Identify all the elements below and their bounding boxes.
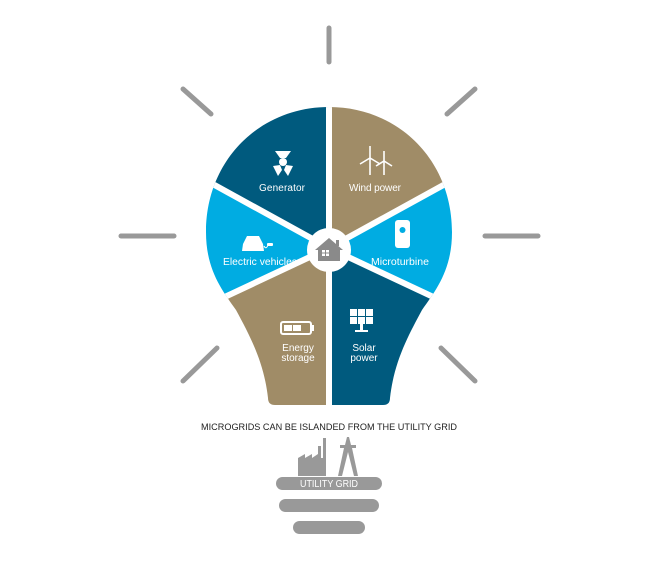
bulb — [206, 107, 452, 405]
label: microturbine: Microturbine — [371, 257, 429, 268]
label: energy storage: Energy — [282, 343, 314, 354]
icon: microturbine — [395, 220, 410, 248]
icon: factory and pylon — [298, 437, 358, 476]
center circle with house icon — [307, 228, 351, 272]
segment: energy storage — [226, 260, 326, 405]
label: energy storage: storage — [281, 353, 315, 364]
utility grid base bars: UTILITY GRID — [300, 479, 358, 490]
label: generator: Generator — [259, 183, 306, 194]
label: solar power: power — [350, 353, 378, 364]
segment: generator — [214, 107, 328, 236]
segment: solar power — [332, 260, 432, 405]
label: wind power: Wind power — [349, 183, 402, 194]
segment: wind power — [330, 107, 444, 236]
segment: microturbine — [348, 185, 452, 296]
icon: battery — [281, 322, 314, 334]
icon: wind turbines — [360, 146, 392, 175]
label: electric vehicles: Electric vehicles — [223, 257, 297, 268]
caption: MICROGRIDS CAN BE ISLANDED FROM THE UTILITY GRID — [201, 422, 457, 433]
utility grid base bars — [276, 477, 382, 534]
icon: car — [242, 236, 273, 251]
icon: solar panel — [350, 309, 373, 332]
light rays — [121, 28, 538, 381]
segment: electric vehicles — [206, 184, 310, 296]
icon: generator radiation — [273, 151, 293, 176]
label: solar power: Solar — [352, 343, 376, 354]
